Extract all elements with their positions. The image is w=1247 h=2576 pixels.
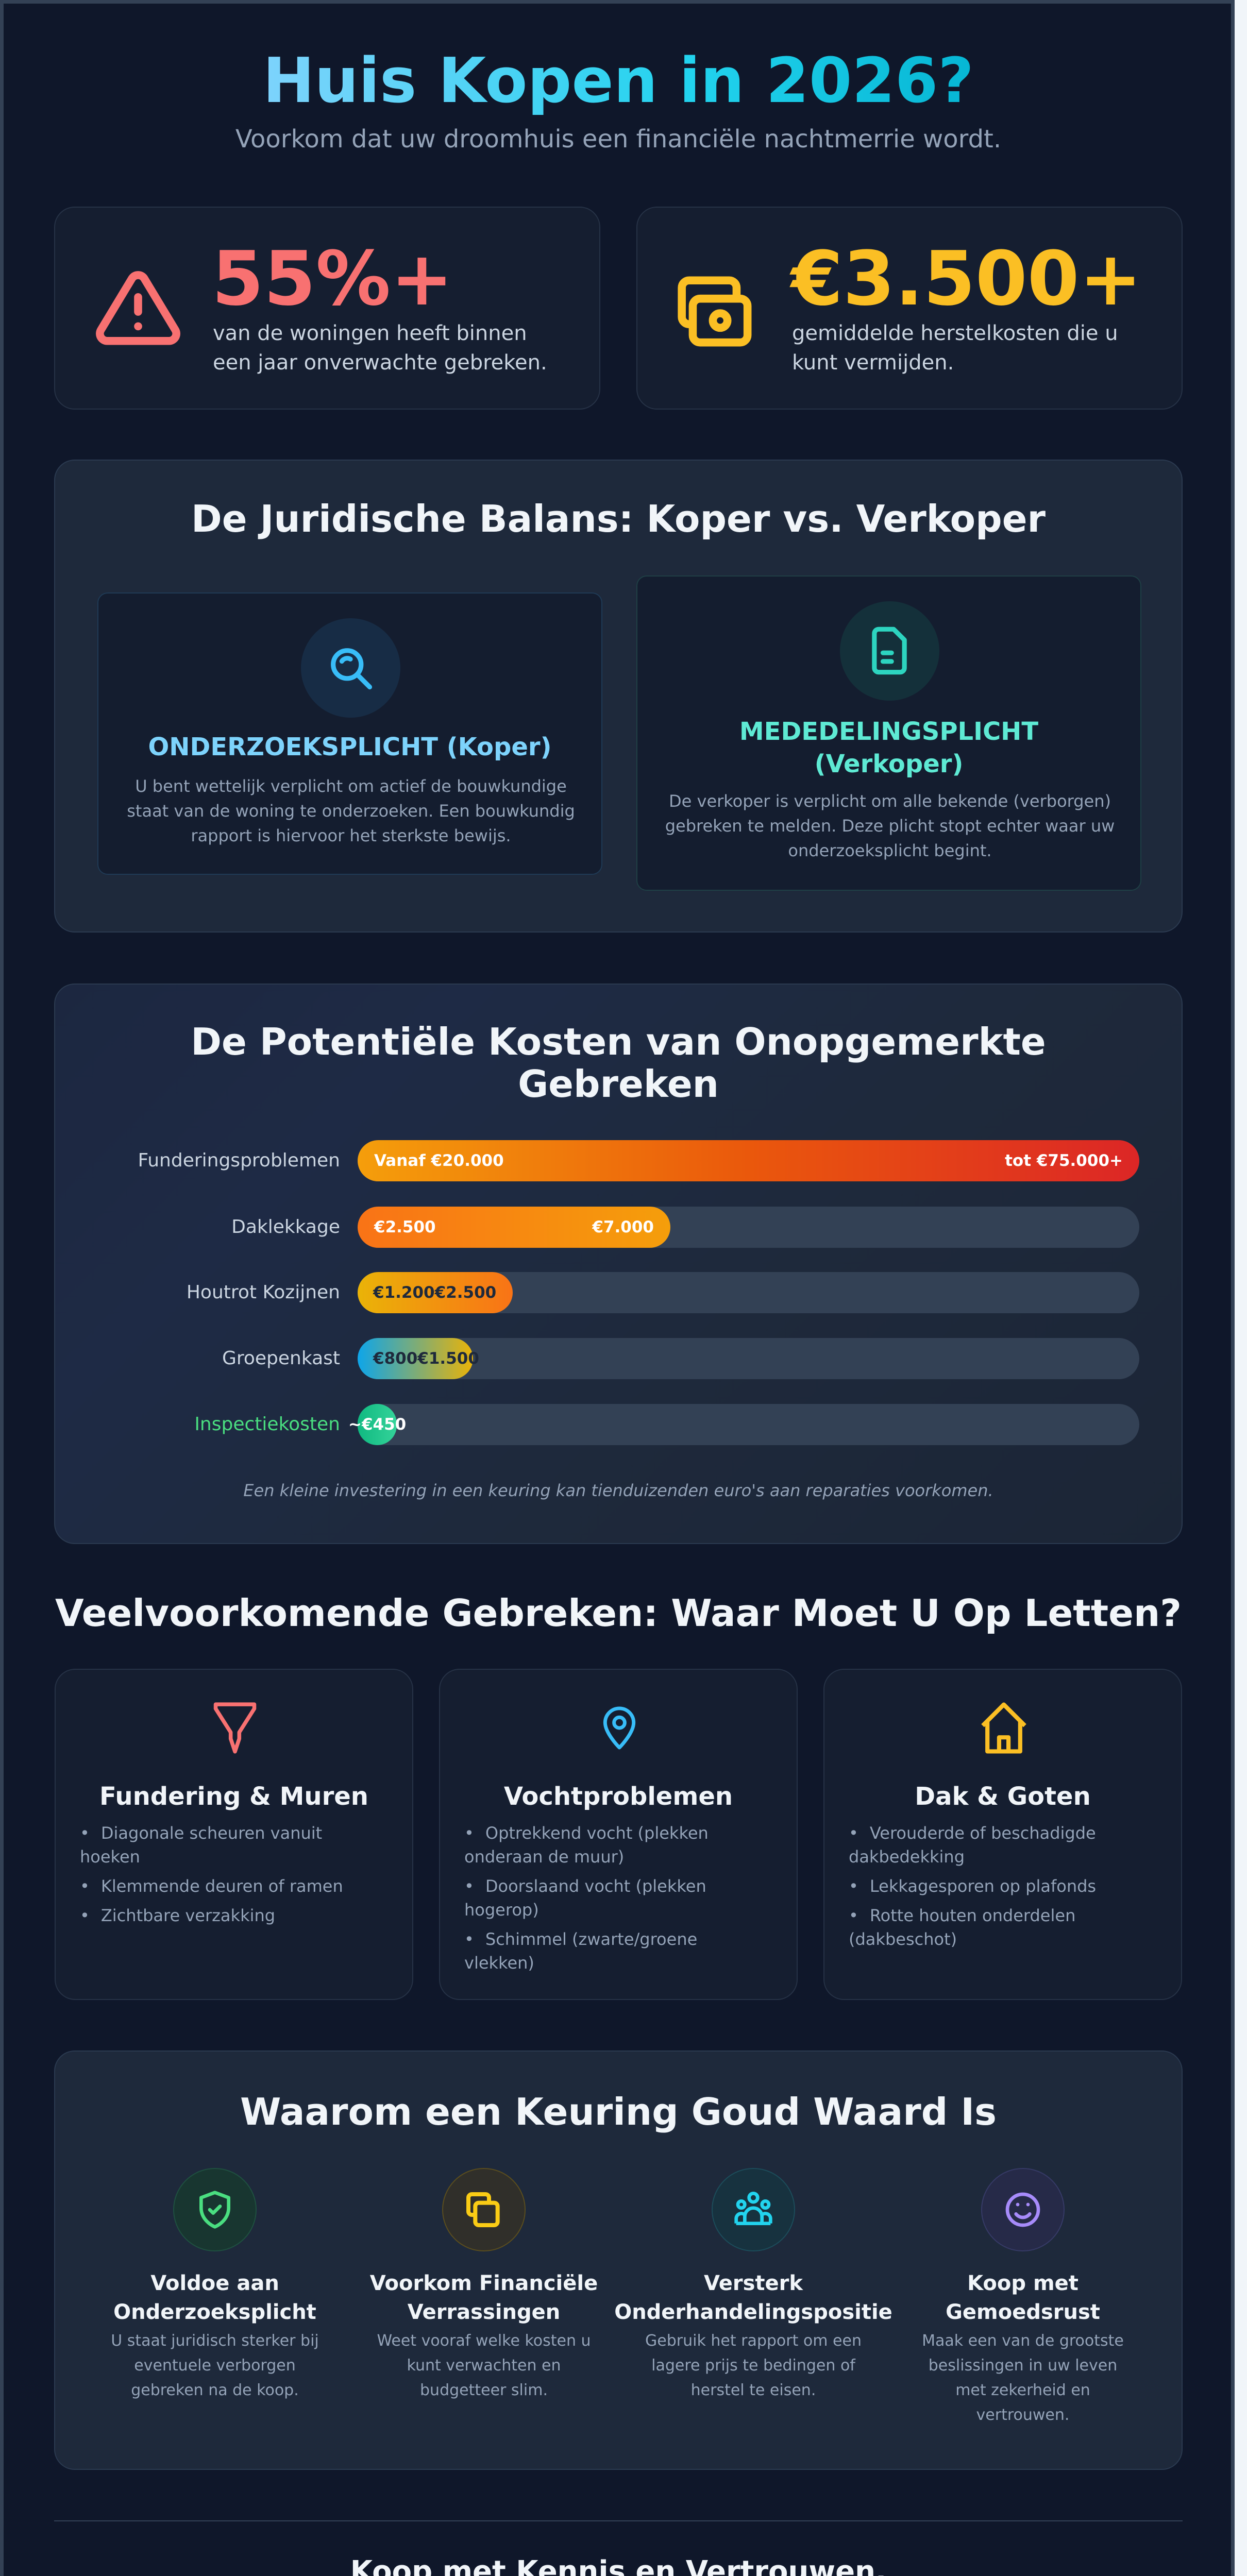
heading: De Potentiële Kosten van Onopgemerkte: [191, 1020, 1046, 1063]
chart footnote: Een kleine investering in een keuring kan tienduizenden euro's aan reparaties voorkomen.: [243, 1481, 993, 1500]
benefit: onderhandeling: Gebruik het rapport om een lagere prijs te bedingen of herstel te eisen.: [645, 2332, 862, 2399]
panel: kosten chart: [54, 984, 1183, 1544]
card text: U bent wettelijk verplicht om actief de bouwkundige staat van de woning te onderzoeken. Een bouwkundig rapport is hiervoor het sterkste bewijs.: [127, 776, 575, 845]
stat description: een jaar onverwachte gebreken.: [213, 351, 547, 375]
bar row: daklekkage: Daklekkage: [231, 1216, 340, 1238]
panel: waarom keuring: [54, 2050, 1183, 2470]
bullet list: Zichtbare verzakking: [101, 1906, 275, 1925]
heading: Waarom een Keuring Goud Waard Is: [240, 2090, 997, 2133]
bullet list: Klemmende deuren of ramen: [101, 1876, 343, 1896]
bullet list: Schimmel (zwarte/groene vlekken): [464, 1929, 697, 1973]
card: dak: [823, 1669, 1182, 2000]
bar row: funderingsproblemen: Vanaf €20.000: [374, 1151, 504, 1170]
card text: De verkoper is verplicht om alle bekende (verborgen) gebreken te melden. Deze plicht stopt echter waar uw onderzoeksplicht begint.: [665, 791, 1115, 860]
bullet list: Diagonale scheuren vanuit hoeken: [80, 1823, 322, 1867]
card title: Vochtproblemen: [504, 1782, 733, 1811]
benefit: verrassingen: Voorkom Financiële: [370, 2272, 598, 2295]
bar row: houtrot: Houtrot Kozijnen: [187, 1282, 340, 1303]
icon: shield check: [173, 2168, 257, 2251]
benefit: onderzoeksplicht: Voldoe aan Onderzoeksplicht: [113, 2272, 316, 2324]
stat value: 55%+: [212, 235, 453, 323]
bar row: daklekkage: [231, 1207, 1139, 1248]
benefit: verrassingen: [370, 2168, 598, 2399]
bar row: funderingsproblemen: [138, 1140, 1139, 1181]
stat description: kunt vermijden.: [792, 351, 954, 375]
benefit: verrassingen: Weet vooraf welke kosten u kunt verwachten en budgetteer slim.: [377, 2332, 591, 2399]
heading: veelvoorkomende gebreken: Veelvoorkomende Gebreken: Waar Moet U Op Letten?: [55, 1591, 1182, 1635]
bar row: inspectiekosten: [194, 1404, 1139, 1445]
bullet list: Verouderde of beschadigde dakbedekking: [849, 1823, 1096, 1867]
bar row: groepenkast: Groepenkast: [222, 1348, 340, 1369]
card title: Fundering & Muren: [99, 1782, 368, 1811]
card title: (Verkoper): [815, 750, 963, 778]
benefit: gemoedsrust: [922, 2168, 1124, 2424]
bullet list: [80, 1823, 343, 1925]
icon: users: [712, 2168, 795, 2251]
card: mededelingsplicht: [636, 575, 1141, 891]
icon: smile: [981, 2168, 1065, 2251]
card title: ONDERZOEKSPLICHT (Koper): [148, 733, 551, 761]
bar row: houtrot: [187, 1272, 1139, 1313]
card title: Dak & Goten: [915, 1782, 1091, 1811]
icon: funnel: [213, 1702, 257, 1754]
bar row: groepenkast: €800€1.500: [373, 1349, 479, 1368]
card: onderzoeksplicht: [97, 592, 602, 875]
card title: MEDEDELINGSPLICHT: [739, 717, 1038, 746]
bar row: groepenkast: [222, 1338, 1139, 1379]
icon: document: [840, 601, 939, 701]
stat card: 55%: [54, 207, 600, 410]
bullet list: [849, 1823, 1096, 1949]
benefit: onderzoeksplicht: [111, 2168, 319, 2399]
icon: cards: [442, 2168, 526, 2251]
card: vocht: [439, 1669, 798, 2000]
bar row: funderingsproblemen: Funderingsproblemen: [138, 1150, 340, 1171]
bar row: daklekkage: €2.500: [374, 1218, 436, 1236]
icon: map pin: [603, 1706, 636, 1750]
bar row: inspectiekosten: ~€450: [348, 1415, 406, 1434]
benefit: verrassingen: Verrassingen: [408, 2300, 560, 2324]
bar chart: [138, 1140, 1139, 1445]
heading: De Juridische Balans: Koper vs. Verkoper: [191, 497, 1046, 540]
benefit: gemoedsrust: Maak een van de grootste beslissingen in uw leven met zekerheid en vertrouwen.: [922, 2332, 1124, 2424]
stat description: gemiddelde herstelkosten die u: [792, 321, 1118, 345]
heading: [191, 1020, 1046, 1106]
stat card: €3.500: [636, 207, 1183, 410]
benefit: gemoedsrust: Koop met Gemoedsrust: [946, 2272, 1100, 2324]
bullet list: Lekkagesporen op plafonds: [870, 1876, 1096, 1896]
bar row: inspectiekosten: Inspectiekosten: [194, 1414, 340, 1435]
panel: juridische balans: [54, 460, 1183, 933]
bar row: daklekkage: €7.000: [592, 1218, 654, 1236]
icon: house: [981, 1702, 1026, 1754]
bullet list: [464, 1823, 709, 1973]
bullet list: Rotte houten onderdelen (dakbeschot): [849, 1906, 1075, 1949]
bar row: houtrot: €1.200€2.500: [373, 1283, 496, 1302]
heading: Gebreken: [518, 1062, 719, 1106]
stat description: van de woningen heeft binnen: [213, 321, 527, 345]
icon: money wallet: [678, 276, 751, 346]
stat description: [792, 321, 1118, 375]
benefit: onderhandeling: Onderhandelingspositie: [614, 2300, 892, 2324]
icon: magnifier: [301, 618, 400, 718]
benefit: onderhandeling: Versterk: [704, 2272, 803, 2295]
stat description: [213, 321, 547, 375]
title: Huis Kopen in 2026?: [263, 45, 974, 117]
card title: [739, 717, 1038, 778]
benefit: onderzoeksplicht: U staat juridisch sterker bij eventuele verborgen gebreken na de koop.: [111, 2332, 319, 2399]
subtitle: Voorkom dat uw droomhuis een financiële nachtmerrie wordt.: [235, 125, 1001, 154]
bar row: funderingsproblemen: tot €75.000+: [1005, 1151, 1123, 1170]
bullet list: Optrekkend vocht (plekken onderaan de muur): [464, 1823, 709, 1867]
benefit: onderhandeling: [614, 2168, 892, 2399]
stat value: €3.500+: [791, 235, 1142, 323]
card: fundering: [55, 1669, 413, 2000]
bullet list: Doorslaand vocht (plekken hogerop): [464, 1876, 706, 1920]
icon: warning triangle: [96, 271, 180, 345]
